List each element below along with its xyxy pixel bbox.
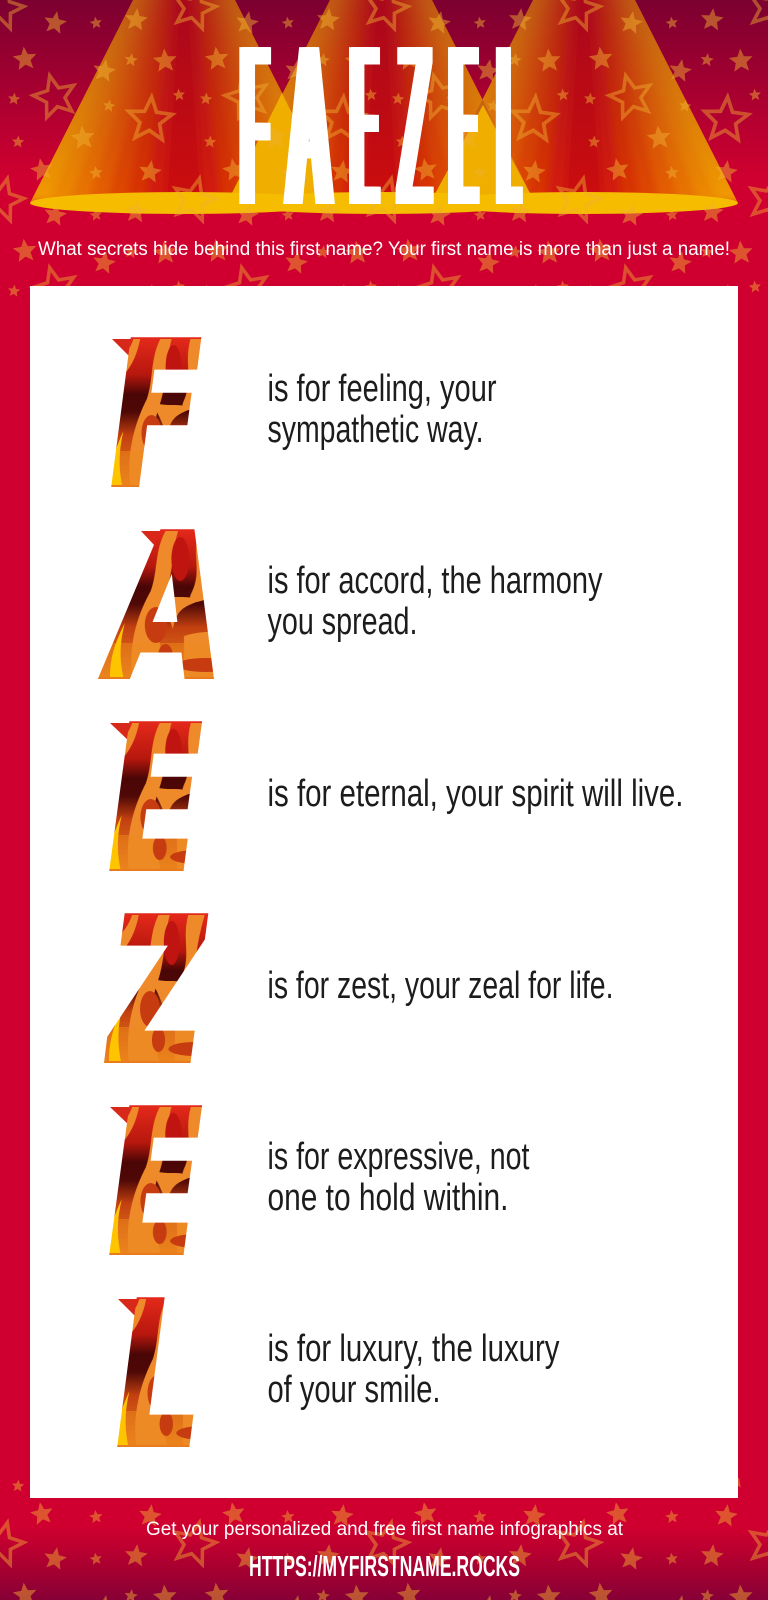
letter Z: Z	[105, 876, 207, 1108]
row: Z	[105, 876, 614, 1108]
spotlights	[0, 0, 768, 214]
footer text: Get your personalized and free first name infographics at	[146, 1519, 624, 1540]
row: F	[110, 301, 497, 533]
letter E: E	[108, 1068, 202, 1301]
spotlight: right	[384, 0, 768, 203]
text: F: sympathetic way.	[268, 409, 484, 451]
text: E: one to hold within.	[268, 1177, 508, 1219]
title: E	[445, 0, 469, 253]
text: E	[268, 1136, 530, 1219]
title: E	[346, 0, 370, 253]
text: L	[268, 1328, 560, 1411]
row: E	[108, 1068, 530, 1301]
stars: header	[0, 0, 768, 299]
spotlight pools	[30, 192, 738, 214]
letter A: A	[100, 493, 225, 725]
row: A	[100, 493, 602, 725]
footer url: HTTPS://MYFIRSTNAME.ROCKS	[249, 1551, 520, 1583]
title: A	[283, 0, 321, 253]
text: L: is for luxury, the luxury	[268, 1328, 560, 1370]
letter L: L	[116, 1261, 201, 1493]
text: Z: is for zest, your zeal for life.	[268, 965, 614, 1007]
stars: footer	[0, 1478, 768, 1600]
text: A: you spread.	[268, 601, 418, 643]
letter E: E	[108, 684, 202, 917]
row: E	[108, 684, 684, 917]
spotlight: left	[0, 0, 384, 203]
letter F: F	[110, 301, 202, 533]
spotlight: middle	[181, 0, 581, 203]
title	[236, 0, 523, 253]
spotlight overlaps	[227, 93, 535, 203]
title: L	[493, 0, 512, 253]
subtitle: What secrets hide behind this first name? Your first name is more than just a name!	[38, 239, 730, 260]
title: F	[236, 0, 261, 253]
text: F: is for feeling, your	[268, 368, 497, 410]
text: A	[268, 560, 602, 643]
row: L	[116, 1261, 560, 1493]
title: Z	[394, 0, 423, 253]
text: L: of your smile.	[268, 1369, 440, 1411]
text: E: is for expressive, not	[268, 1136, 530, 1178]
text: F	[268, 368, 497, 451]
text: A: is for accord, the harmony	[268, 560, 602, 602]
panel: letters	[30, 286, 738, 1498]
spotlight top shading	[30, 0, 738, 203]
